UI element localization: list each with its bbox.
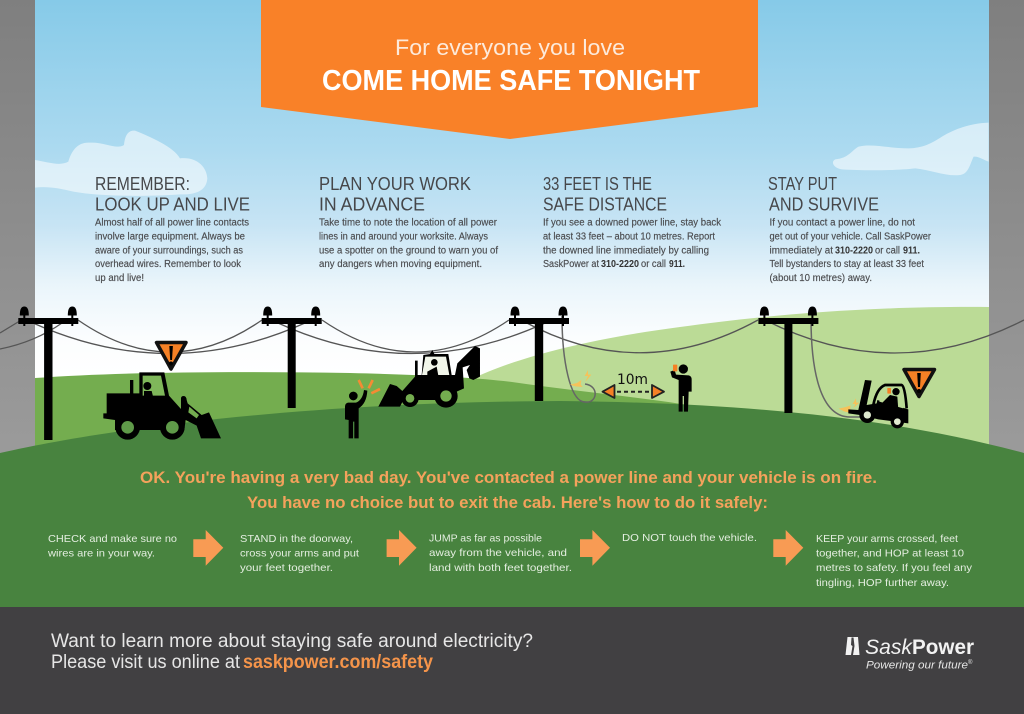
step 5 text: together, and HOP at least 10 xyxy=(816,548,964,560)
step 2 text: STAND in the doorway, xyxy=(240,533,353,545)
overhead wires xyxy=(0,319,1024,354)
panel: stay put and survive: get out of your vehicle. Call SaskPower xyxy=(770,232,932,242)
panel: look up and live xyxy=(95,173,250,284)
step 1 text xyxy=(47,533,177,560)
panel: safe distance: 33 FEET IS THE xyxy=(543,173,652,194)
light green hill xyxy=(470,307,989,460)
panel: safe distance: 310-2220 xyxy=(601,259,639,270)
panel: look up and live: LOOK UP AND LIVE xyxy=(95,194,250,214)
bad day warning heading xyxy=(140,468,877,512)
distance marker 10m xyxy=(602,372,664,398)
right grey wall xyxy=(989,0,1024,460)
panel: stay put and survive: If you contact a power line, do not xyxy=(770,218,915,229)
arrow 1 xyxy=(193,530,223,566)
arrow 4 xyxy=(773,530,803,566)
title banner xyxy=(261,0,758,139)
step 3 text: land with both feet together. xyxy=(429,562,572,574)
utility pole 2 xyxy=(262,306,322,408)
panel: stay put and survive: STAY PUT xyxy=(768,173,837,194)
panel: plan your work: IN ADVANCE xyxy=(319,194,425,214)
cloud right xyxy=(833,123,989,175)
wheel loader xyxy=(103,372,221,440)
dark green foreground hill xyxy=(0,401,1024,607)
arrow 3 xyxy=(580,530,610,566)
forklift sparks xyxy=(839,398,859,413)
utility pole 4 xyxy=(758,306,818,413)
panel: safe distance: SAFE DISTANCE xyxy=(543,194,667,214)
SaskPower logo: Sask xyxy=(865,635,913,659)
panel: plan your work xyxy=(319,173,498,270)
panel: plan your work: PLAN YOUR WORK xyxy=(319,173,472,194)
panel: stay put and survive: (about 10 metres) away. xyxy=(770,273,872,284)
panel: stay put and survive: 911. xyxy=(903,245,920,256)
icon: warning sign over loader xyxy=(156,342,186,369)
SaskPower logo: ® xyxy=(968,659,973,666)
footer call to action: saskpower.com/safety xyxy=(243,652,433,673)
step 3 text xyxy=(429,532,572,574)
panel: plan your work: lines in and around your worksite. Always xyxy=(319,232,488,242)
step 5 text: metres to safety. If you feel any xyxy=(816,562,973,574)
panel: stay put and survive: 310-2220 xyxy=(835,245,873,256)
panel: plan your work: any dangers when moving equipment. xyxy=(319,259,482,270)
panel: plan your work: Take time to note the location of all power xyxy=(319,218,498,229)
panel: safe distance: the downed line immediately by calling xyxy=(543,245,709,256)
panel: safe distance: SaskPower at xyxy=(543,259,599,270)
icon: warning sign over forklift xyxy=(904,370,934,396)
sky background xyxy=(35,0,989,375)
panel: stay put and survive: immediately at xyxy=(770,245,833,256)
spotter waving xyxy=(345,380,380,438)
step 5 text: tingling, HOP further away. xyxy=(816,577,949,589)
step 1 text: CHECK and make sure no xyxy=(48,533,177,545)
panel: stay put and survive xyxy=(768,173,932,284)
distance marker 10m: 10m xyxy=(617,372,648,388)
arrow 2 xyxy=(387,530,417,566)
step 4 text: DO NOT touch the vehicle. xyxy=(622,532,757,544)
panel: plan your work: use a spotter on the ground to warn you of xyxy=(319,245,498,256)
panel: safe distance: at least 33 feet – about 10 metres. Report xyxy=(543,232,715,242)
panel: look up and live: overhead wires. Remember to look xyxy=(95,259,242,270)
title banner: COME HOME SAFE TONIGHT xyxy=(322,65,700,97)
panel: look up and live: REMEMBER: xyxy=(95,173,190,194)
utility pole 3 xyxy=(509,306,569,401)
bad day warning heading: You have no choice but to exit the cab. Here's how to do it safely: xyxy=(247,493,768,512)
panel: look up and live: involve large equipment. Always be xyxy=(95,232,245,242)
panel: safe distance: or call xyxy=(641,259,666,270)
step 3 text: away from the vehicle, and xyxy=(429,547,567,559)
SaskPower logo: Powering our future xyxy=(866,660,968,672)
panel: look up and live: aware of your surroundings, such as xyxy=(95,245,243,256)
SaskPower logo xyxy=(846,635,975,672)
panel: safe distance: 911. xyxy=(669,259,685,270)
step 5 text: KEEP your arms crossed, feet xyxy=(816,533,958,545)
step 5 text xyxy=(816,533,973,589)
downed line sparks xyxy=(570,370,591,387)
step 1 text: wires are in your way. xyxy=(47,548,155,560)
bad day warning heading: OK. You're having a very bad day. You've contacted a power line and your vehicle is on fire. xyxy=(140,468,877,487)
backhoe loader xyxy=(378,346,480,408)
step 3 text: JUMP as far as possible xyxy=(429,532,542,544)
panel: stay put and survive: or call xyxy=(875,245,900,256)
forklift xyxy=(848,380,908,428)
footer band xyxy=(0,607,1024,714)
left grey wall xyxy=(0,0,35,460)
panel: safe distance xyxy=(543,173,722,270)
panel: safe distance: If you see a downed power line, stay back xyxy=(543,218,722,229)
footer call to action xyxy=(51,631,533,673)
cloud left xyxy=(35,131,207,196)
title banner: For everyone you love xyxy=(395,35,625,60)
step 2 text xyxy=(240,533,359,574)
footer call to action: Please visit us online at xyxy=(51,652,241,673)
mid green hill xyxy=(35,372,700,460)
step 2 text: your feet together. xyxy=(240,562,333,574)
footer call to action: Want to learn more about staying safe around electricity? xyxy=(51,631,533,652)
panel: look up and live: Almost half of all power line contacts xyxy=(95,218,249,229)
utility pole 1 xyxy=(18,306,78,440)
panel: stay put and survive: Tell bystanders to stay at least 33 feet xyxy=(770,259,924,270)
downed wires xyxy=(562,316,860,417)
panel: stay put and survive: AND SURVIVE xyxy=(769,194,879,214)
panel: look up and live: up and live! xyxy=(95,273,144,284)
worker on phone xyxy=(670,364,692,412)
SaskPower logo: Power xyxy=(912,635,975,659)
step 2 text: cross your arms and put xyxy=(240,548,359,560)
